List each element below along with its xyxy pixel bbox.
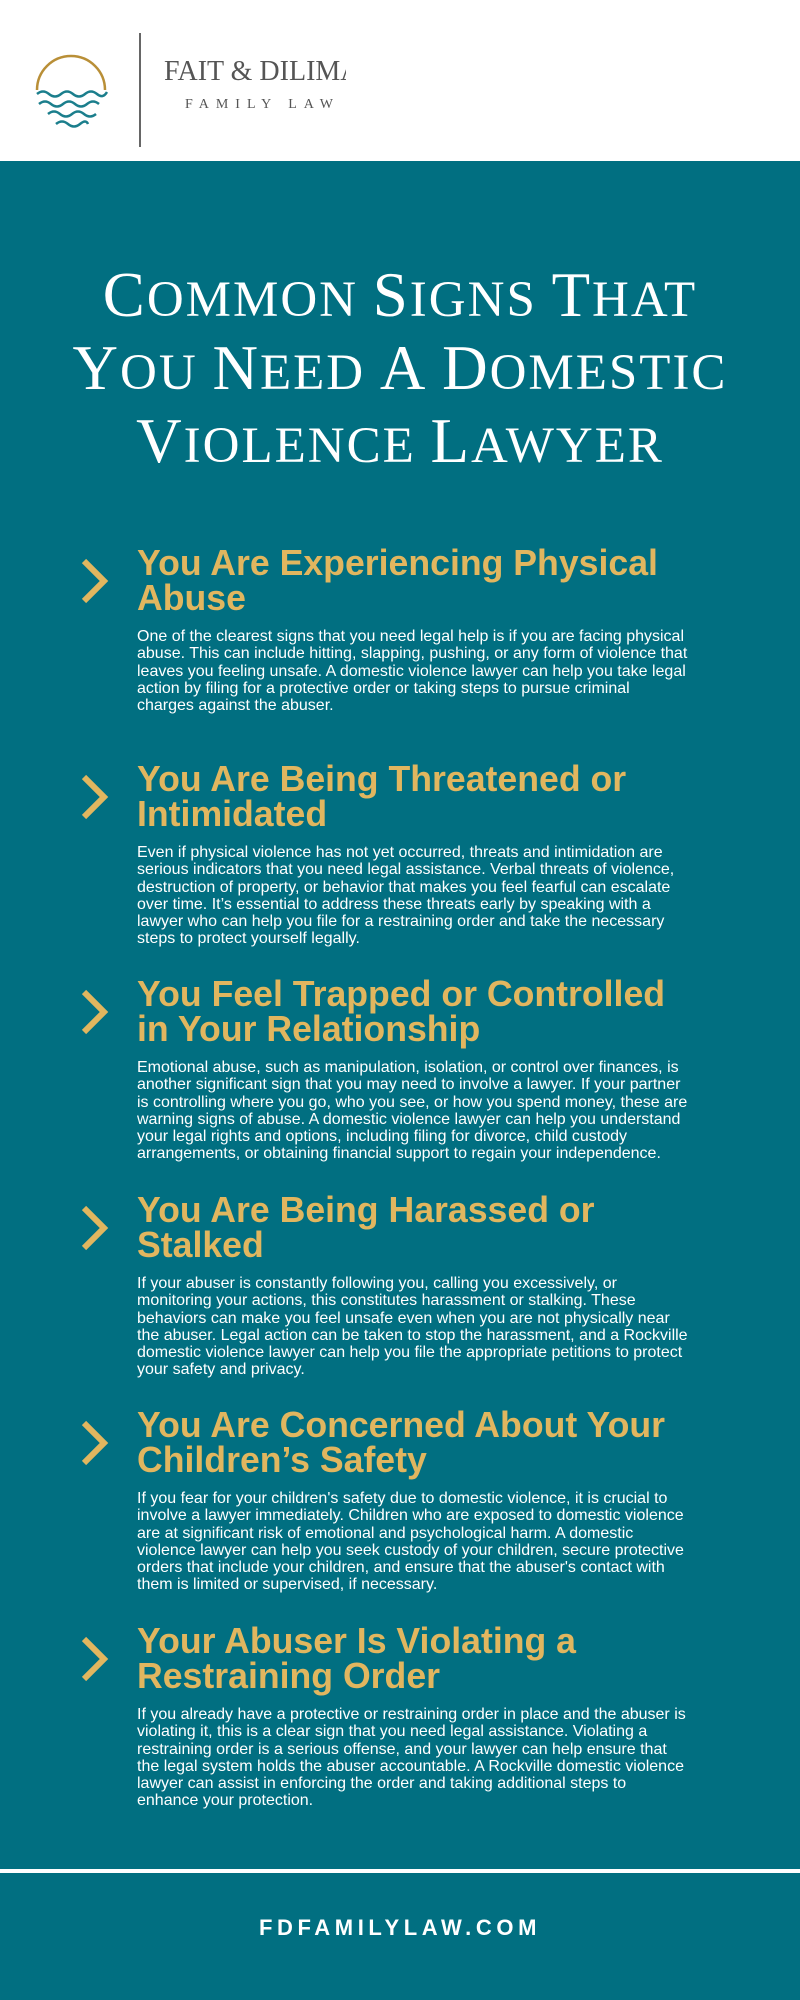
text: Even if physical violence has not yet occurred, threats and intimidation are bbox=[137, 844, 663, 861]
heading: Restraining Order bbox=[137, 1654, 440, 1696]
heading: Intimidated bbox=[137, 792, 327, 834]
heading: You Are Being Threatened or bbox=[137, 758, 626, 799]
text: Emotional abuse, such as manipulation, isolation, or control over finances, is bbox=[137, 1059, 679, 1076]
heading: Stalked bbox=[137, 1224, 264, 1264]
heading: You Are Concerned About Your bbox=[137, 1404, 665, 1445]
heading: Children’s Safety bbox=[137, 1438, 427, 1480]
section 5 bbox=[82, 1404, 684, 1593]
text: over time. It’s essential to address these threats early by speaking with a bbox=[137, 896, 651, 913]
heading: You Are Experiencing Physical bbox=[137, 542, 658, 583]
text: the legal system holds the abuser accountable. A Rockville domestic violence bbox=[137, 1758, 684, 1775]
logo text: FAMILY LAW bbox=[185, 97, 340, 112]
text: If you fear for your children's safety due to domestic violence, it is crucial to bbox=[137, 1490, 667, 1507]
text: domestic violence lawyer can help you file the appropriate petitions to protect bbox=[137, 1344, 682, 1361]
text: them is limited or supervised, if necessary. bbox=[137, 1576, 437, 1593]
section 4 bbox=[82, 1189, 688, 1378]
text: One of the clearest signs that you need legal help is if you are facing physical bbox=[137, 628, 684, 645]
text: your safety and privacy. bbox=[137, 1361, 305, 1378]
heading bbox=[137, 542, 658, 618]
text: violence lawyer can help you seek custody of your children, secure protective bbox=[137, 1542, 684, 1559]
text: another significant sign that you may need to involve a lawyer. If your partner bbox=[137, 1076, 680, 1093]
icon: chevron bbox=[82, 1420, 108, 1466]
text: behaviors can make you feel unsafe even when you are not physically near bbox=[137, 1310, 670, 1327]
title: COMMON SIGNS THAT bbox=[103, 260, 697, 330]
text: violating it, this is a clear sign that you need legal assistance. Violating a bbox=[137, 1723, 647, 1740]
heading bbox=[137, 1620, 576, 1696]
text: orders that include your children, and ensure that the abuser's contact with bbox=[137, 1559, 665, 1576]
section 1 bbox=[82, 542, 688, 714]
heading: Your Abuser Is Violating a bbox=[137, 1620, 576, 1661]
text: steps to protect yourself legally. bbox=[137, 930, 360, 947]
text: restraining order is a serious offense, and your lawyer can help ensure that bbox=[137, 1741, 667, 1758]
text: If your abuser is constantly following you, calling you excessively, or bbox=[137, 1275, 617, 1292]
title: YOU NEED A DOMESTIC bbox=[73, 333, 727, 403]
icon: chevron bbox=[82, 1636, 108, 1682]
heading bbox=[137, 973, 665, 1048]
text: lawyer who can help you file for a restraining order and take the necessary bbox=[137, 913, 664, 930]
text: serious indicators that you need legal assistance. Verbal threats of violence, bbox=[137, 861, 674, 878]
text: destruction of property, or behavior that makes you feel fearful can escalate bbox=[137, 879, 670, 896]
title: VIOLENCE LAWYER bbox=[136, 406, 664, 476]
heading: in Your Relationship bbox=[137, 1008, 480, 1048]
heading: Abuse bbox=[137, 576, 246, 618]
title bbox=[73, 260, 727, 476]
logo text bbox=[164, 56, 346, 112]
text: monitoring your actions, this constitutes harassment or stalking. These bbox=[137, 1292, 636, 1309]
icon: chevron bbox=[82, 774, 108, 820]
heading bbox=[137, 1404, 665, 1480]
heading: You Are Being Harassed or bbox=[137, 1189, 595, 1230]
text bbox=[137, 1275, 688, 1378]
text: arrangements, or obtaining financial support to regain your independence. bbox=[137, 1145, 661, 1162]
text bbox=[137, 1490, 684, 1593]
footer url: FDFAMILYLAW.COM bbox=[259, 1915, 541, 1940]
section 3 bbox=[82, 973, 687, 1162]
heading: You Feel Trapped or Controlled bbox=[137, 973, 665, 1014]
text: action by filing for a protective order or taking steps to pursue criminal bbox=[137, 680, 630, 697]
text bbox=[137, 844, 674, 947]
icon: chevron bbox=[82, 1206, 108, 1250]
header bbox=[0, 0, 800, 161]
logo icon bbox=[36, 54, 108, 128]
text: If you already have a protective or restraining order in place and the abuser is bbox=[137, 1706, 686, 1723]
text: involve a lawyer immediately. Children who are exposed to domestic violence bbox=[137, 1507, 684, 1524]
text: enhance your protection. bbox=[137, 1792, 313, 1809]
text: leaves you feeling unsafe. A domestic violence lawyer can help you take legal bbox=[137, 663, 686, 680]
text: warning signs of abuse. A domestic violence lawyer can help you understand bbox=[137, 1111, 680, 1128]
text: abuse. This can include hitting, slapping, pushing, or any form of violence that bbox=[137, 645, 687, 662]
text bbox=[137, 628, 688, 714]
text: lawyer can assist in enforcing the order and taking additional steps to bbox=[137, 1775, 626, 1792]
section 6 bbox=[82, 1620, 686, 1809]
heading bbox=[137, 1189, 595, 1264]
text: the abuser. Legal action can be taken to stop the harassment, and a Rockville bbox=[137, 1327, 688, 1344]
icon: chevron bbox=[82, 990, 108, 1034]
text: are at significant risk of emotional and psychological harm. A domestic bbox=[137, 1525, 633, 1542]
text bbox=[137, 1059, 687, 1162]
text bbox=[137, 1706, 686, 1809]
text: charges against the abuser. bbox=[137, 697, 334, 714]
text: your legal rights and options, including filing for divorce, child custody bbox=[137, 1128, 627, 1145]
text: is controlling where you go, who you see, or how you spend money, these are bbox=[137, 1094, 687, 1111]
heading bbox=[137, 758, 626, 834]
section 2 bbox=[82, 758, 674, 947]
icon: chevron bbox=[82, 558, 108, 604]
